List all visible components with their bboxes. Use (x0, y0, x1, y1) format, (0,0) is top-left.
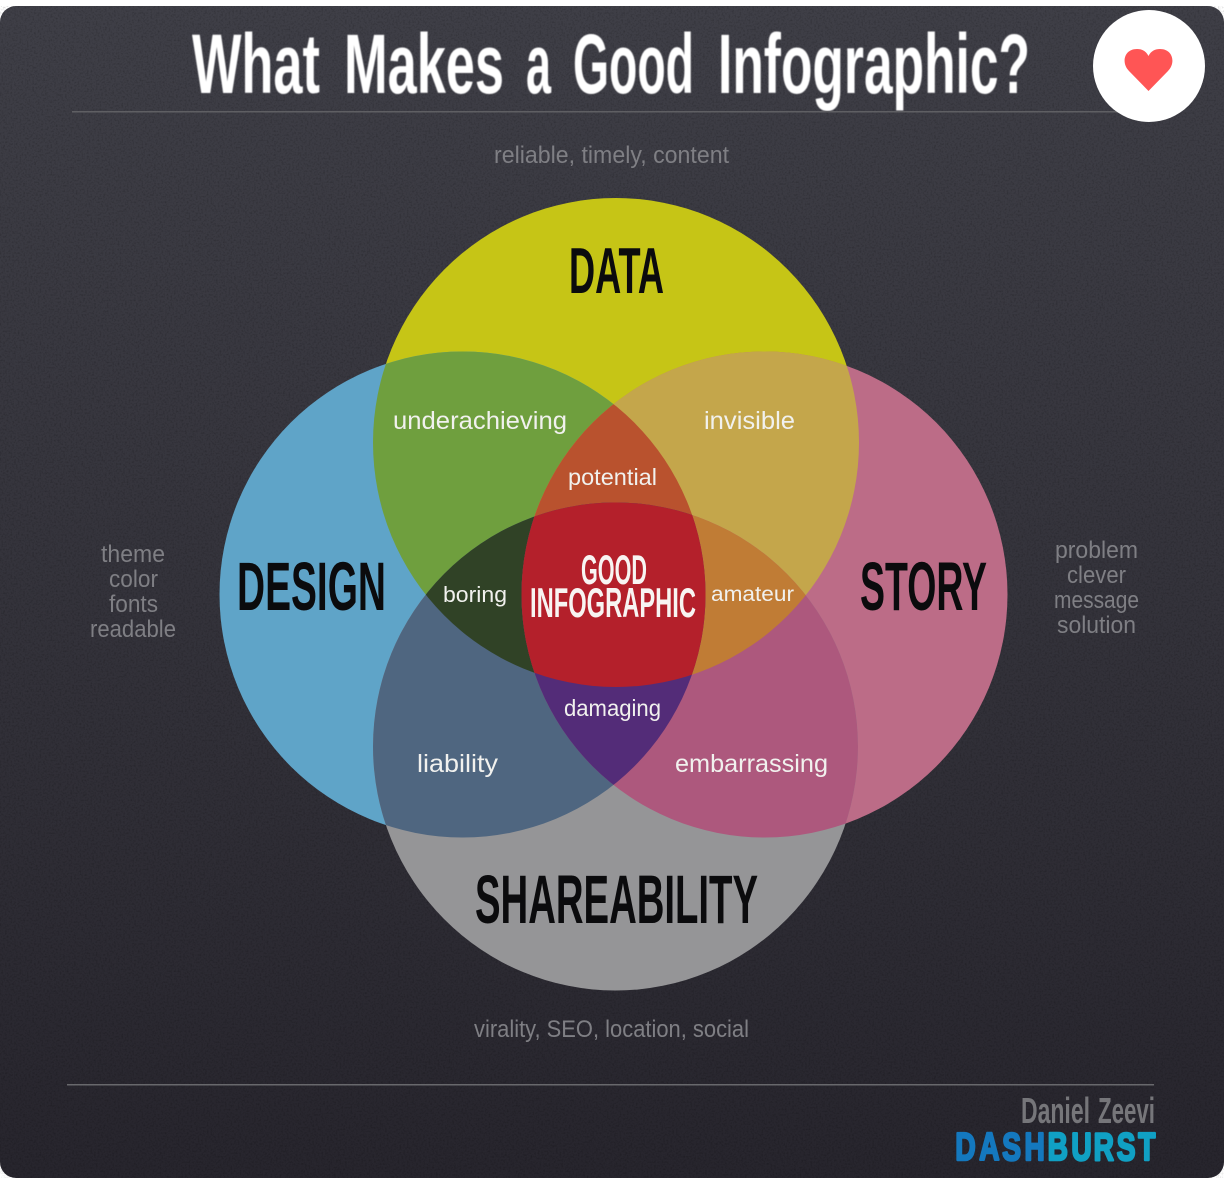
label: shareability attributes: virality, SEO, location, social (474, 1016, 749, 1043)
credit: author: Daniel (1021, 1090, 1090, 1131)
center label: good infographic (530, 546, 696, 626)
logo: dashburst (955, 1126, 1156, 1169)
circle: shareability (373, 502, 858, 990)
label: data attributes: reliable, timely, content (494, 142, 729, 169)
label list: design attributes (90, 541, 176, 643)
overlap: data and story (534, 352, 859, 596)
overlap: data, design, shareability (426, 502, 692, 673)
label: embarrassing: embarrassing (675, 750, 828, 778)
title: Infographic? (718, 17, 1030, 111)
label: amateur: amateur (711, 583, 794, 606)
label list: story attributes: clever (1067, 562, 1126, 589)
icon: heart (1125, 49, 1172, 91)
label: boring: boring (443, 582, 507, 607)
logo: dashburst: BURST (1048, 1126, 1156, 1169)
heading: story: STORY (860, 548, 987, 625)
label list: story attributes: solution (1057, 612, 1136, 639)
overlap: data and design (373, 352, 614, 595)
label: potential: potential (568, 464, 657, 490)
title: Makes (344, 17, 504, 111)
logo: dashburst: DASH (955, 1126, 1045, 1169)
circle: design (220, 352, 706, 838)
title: Good (573, 17, 694, 111)
overlap: design, story, shareability (522, 502, 706, 785)
label: invisible: invisible (704, 407, 795, 435)
title: What (192, 17, 320, 111)
label list: design attributes: fonts (109, 591, 158, 618)
venn diagram (220, 198, 1008, 990)
circle: data (373, 198, 859, 687)
label list: story attributes: problem (1055, 537, 1138, 564)
center label: good infographic: GOOD (581, 546, 647, 593)
label: liability: liability (417, 750, 499, 778)
label list: design attributes: color (109, 566, 158, 593)
center: all four circles (522, 502, 706, 687)
label list: story attributes (1054, 537, 1139, 639)
title (192, 17, 1030, 111)
label list: design attributes: readable (90, 616, 176, 643)
credit: author: Zeevi (1098, 1090, 1155, 1131)
overlap: story and shareability (534, 515, 858, 838)
heading: design: DESIGN (237, 548, 386, 625)
overlap: design and shareability (373, 516, 614, 838)
center label: good infographic: INFOGRAPHIC (530, 579, 696, 626)
like button (1093, 10, 1205, 122)
label: damaging: damaging (564, 695, 661, 721)
circle: story (522, 352, 1008, 838)
label: underachieving: underachieving (393, 407, 567, 435)
heading: data: DATA (569, 234, 664, 307)
label list: story attributes: message (1054, 587, 1139, 614)
heading: shareability: SHAREABILITY (475, 861, 758, 938)
overlap: data, story, shareability (522, 502, 806, 675)
title: a (526, 17, 552, 111)
overlap: data, design, story (534, 404, 692, 516)
label list: design attributes: theme (101, 541, 165, 568)
